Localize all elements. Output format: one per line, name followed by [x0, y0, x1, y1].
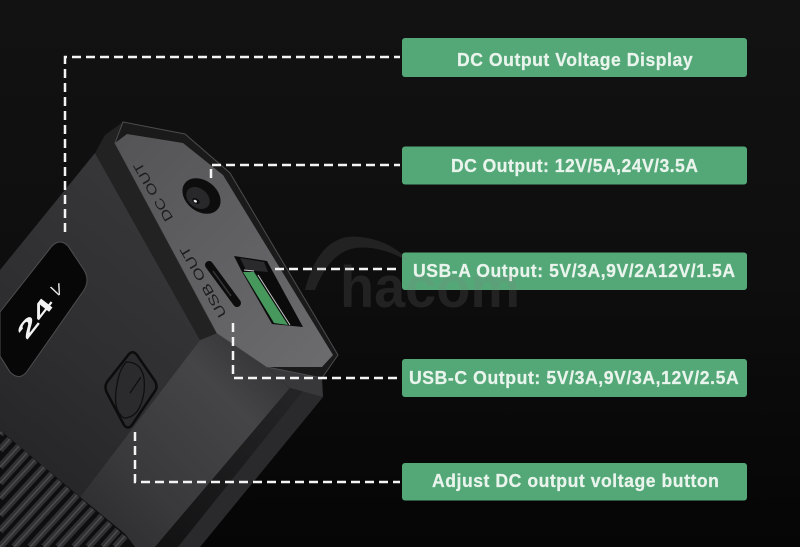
label: USB-A output: USB-A Output: 5V/3A,9V/2A12V/1.5A: [413, 261, 735, 281]
label: USB-A output: [402, 252, 747, 290]
DC jack port: [175, 171, 228, 221]
label: USB-C output: USB-C Output: 5V/3A,9V/3A,12V/2.5A: [409, 368, 739, 388]
side highlight strip: [178, 391, 323, 547]
label: adjust button: Adjust DC output voltage button: [432, 471, 719, 491]
voltage display: 24: [12, 293, 59, 344]
label: adjust button: [402, 463, 747, 500]
label: DC output: DC Output: 12V/5A,24V/3.5A: [451, 156, 698, 176]
watermark: [305, 237, 520, 320]
end panel face: [115, 134, 333, 367]
leader: DC output: [211, 165, 400, 178]
label: USB-C output: [402, 359, 747, 397]
USB OUT engraved label: USB OUT: [177, 244, 230, 320]
voltage display: [0, 242, 87, 377]
leader: adjust button: [135, 432, 400, 482]
end panel rim: [115, 122, 338, 378]
lower body facet: [80, 333, 290, 547]
label: DC output voltage display: [402, 38, 747, 77]
DC OUT engraved label: DC OUT: [130, 160, 176, 224]
leader: USB-A output: [275, 268, 400, 270]
lower bevel under end panel: [267, 367, 323, 397]
label: DC output voltage display: DC Output Voltage Display: [457, 50, 693, 70]
label: DC output: [402, 146, 747, 184]
USB-C port: [209, 265, 237, 303]
watermark: hacom: [340, 255, 520, 320]
leader: voltage display: [65, 57, 400, 232]
device main body: [0, 153, 200, 547]
power button: [106, 352, 156, 428]
grip ribs: [0, 425, 136, 547]
dashed leader lines: [65, 57, 400, 482]
leader: USB-C output: [233, 323, 400, 378]
power bank device: [0, 122, 338, 547]
right side facet: [155, 388, 323, 547]
dark edge strip: [95, 122, 217, 340]
voltage display: V: [49, 281, 66, 301]
USB-A port: [234, 256, 303, 327]
